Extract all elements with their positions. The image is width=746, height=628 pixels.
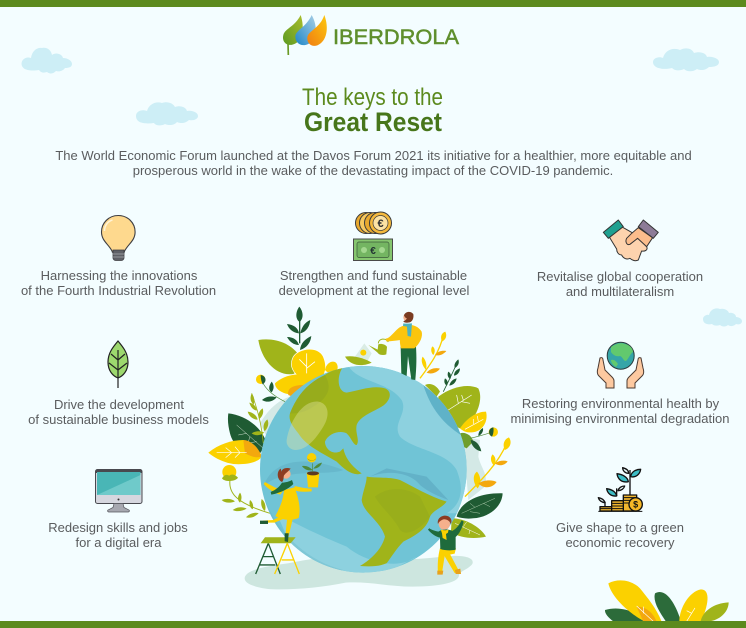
person: man watering xyxy=(345,312,422,380)
torso and arm xyxy=(386,325,422,348)
icon: leaf xyxy=(108,341,128,388)
left olive sprig xyxy=(248,393,268,443)
key: sustainable development: development at the regional level xyxy=(279,283,470,298)
cloud: right xyxy=(703,308,742,326)
key: environmental health: minimising environmental degradation xyxy=(511,411,729,426)
person: woman with plant xyxy=(256,453,322,574)
icon: handshake xyxy=(603,220,658,261)
legs xyxy=(438,548,459,573)
right olive leaf xyxy=(438,386,480,428)
lower left sprig xyxy=(222,465,270,518)
logo mark xyxy=(283,15,327,55)
cloud: top left xyxy=(22,48,72,74)
title line 2: Great Reset xyxy=(304,107,442,137)
key: sustainable business models xyxy=(28,341,209,427)
intro text: The World Economic Forum launched at the Davos Forum 2021 its initiative for a healthier, more equitable and xyxy=(55,148,692,163)
right flower sprig xyxy=(470,427,498,438)
large olive leaf xyxy=(258,339,302,374)
translucent highlight xyxy=(287,402,328,450)
key: sustainable business models: of sustainable business models xyxy=(28,412,209,427)
south america xyxy=(360,477,447,566)
icon: light bulb xyxy=(102,216,135,260)
bottom bar xyxy=(0,621,746,628)
title line 1: The keys to the xyxy=(302,84,443,111)
bottom right leaves xyxy=(605,580,729,622)
key: global cooperation xyxy=(537,220,703,299)
key: fourth industrial revolution: of the Fourth Industrial Revolution xyxy=(21,283,216,298)
key: digital skills xyxy=(48,470,188,550)
icon: plants growing from coins: $ xyxy=(633,500,638,510)
small leaf behind figure xyxy=(425,384,440,397)
potted plant xyxy=(302,453,322,487)
cloud: centre left xyxy=(136,102,198,125)
person: child xyxy=(428,516,464,575)
dark green leaf xyxy=(228,413,267,454)
title xyxy=(302,84,443,137)
legs xyxy=(263,517,293,536)
icon: coins and banknote: € xyxy=(370,246,376,257)
top left sprig xyxy=(287,307,311,350)
label: Revitalise global cooperation xyxy=(537,269,703,284)
pale backing shape xyxy=(260,397,486,500)
cloud: top right xyxy=(653,48,719,71)
label: Drive the development xyxy=(54,397,184,412)
scarf xyxy=(441,529,449,540)
dark ocean shading xyxy=(423,385,461,435)
key: green recovery: economic recovery xyxy=(565,535,675,550)
right dark leaf xyxy=(457,493,503,519)
ground shadow xyxy=(245,556,473,589)
top bar xyxy=(0,0,746,7)
lighter ocean band xyxy=(280,366,467,573)
intro text: prosperous world in the wake of the devastating impact of the COVID-19 pandemic. xyxy=(133,163,613,178)
key: environmental health xyxy=(511,342,729,426)
intro text xyxy=(55,148,692,178)
label: Give shape to a green xyxy=(556,520,684,535)
icon: coins and banknote xyxy=(354,212,392,260)
right lower sprig xyxy=(465,437,511,497)
central illustration: globe with people and plants xyxy=(208,307,511,589)
icon: hands holding globe xyxy=(597,342,644,388)
ocean xyxy=(260,366,467,573)
ladder xyxy=(256,543,280,574)
key: global cooperation: and multilateralism xyxy=(566,284,674,299)
watering can xyxy=(368,344,387,355)
right yellow leaf xyxy=(460,412,487,432)
head and hair xyxy=(439,518,450,530)
label: Redesign skills and jobs xyxy=(48,520,188,535)
watering can spray and seedling xyxy=(355,343,372,363)
key: digital skills: for a digital era xyxy=(76,535,162,550)
small yellow leaf xyxy=(325,362,338,373)
logo: Iberdrola xyxy=(283,15,459,55)
globe xyxy=(260,366,467,573)
scarf xyxy=(403,323,412,337)
icon: coins and banknote: € xyxy=(377,218,384,230)
dress xyxy=(275,487,300,520)
label: Harnessing the innovations xyxy=(41,268,198,283)
north america xyxy=(290,367,390,474)
yellow leaf lower xyxy=(275,374,313,394)
legs xyxy=(401,347,416,380)
left yellow leaf xyxy=(208,440,262,464)
key: sustainable development xyxy=(279,212,470,298)
label: Restoring environmental health by xyxy=(522,396,720,411)
yellow leaf xyxy=(291,349,326,381)
logo wordmark: IBERDROLA xyxy=(333,26,459,49)
left flower sprig xyxy=(256,375,285,402)
key: fourth industrial revolution xyxy=(21,216,216,298)
head and hair xyxy=(281,469,291,479)
scarf xyxy=(271,480,293,495)
right top sprigs xyxy=(420,332,460,392)
label: Strengthen and fund sustainable xyxy=(280,268,467,283)
key: green recovery xyxy=(556,468,684,550)
icon: desktop monitor xyxy=(96,470,142,512)
right lower olive leaf xyxy=(451,518,486,538)
torso and arms xyxy=(428,520,464,550)
arms xyxy=(264,482,312,495)
head xyxy=(403,313,413,322)
right small green leaves xyxy=(460,433,473,448)
